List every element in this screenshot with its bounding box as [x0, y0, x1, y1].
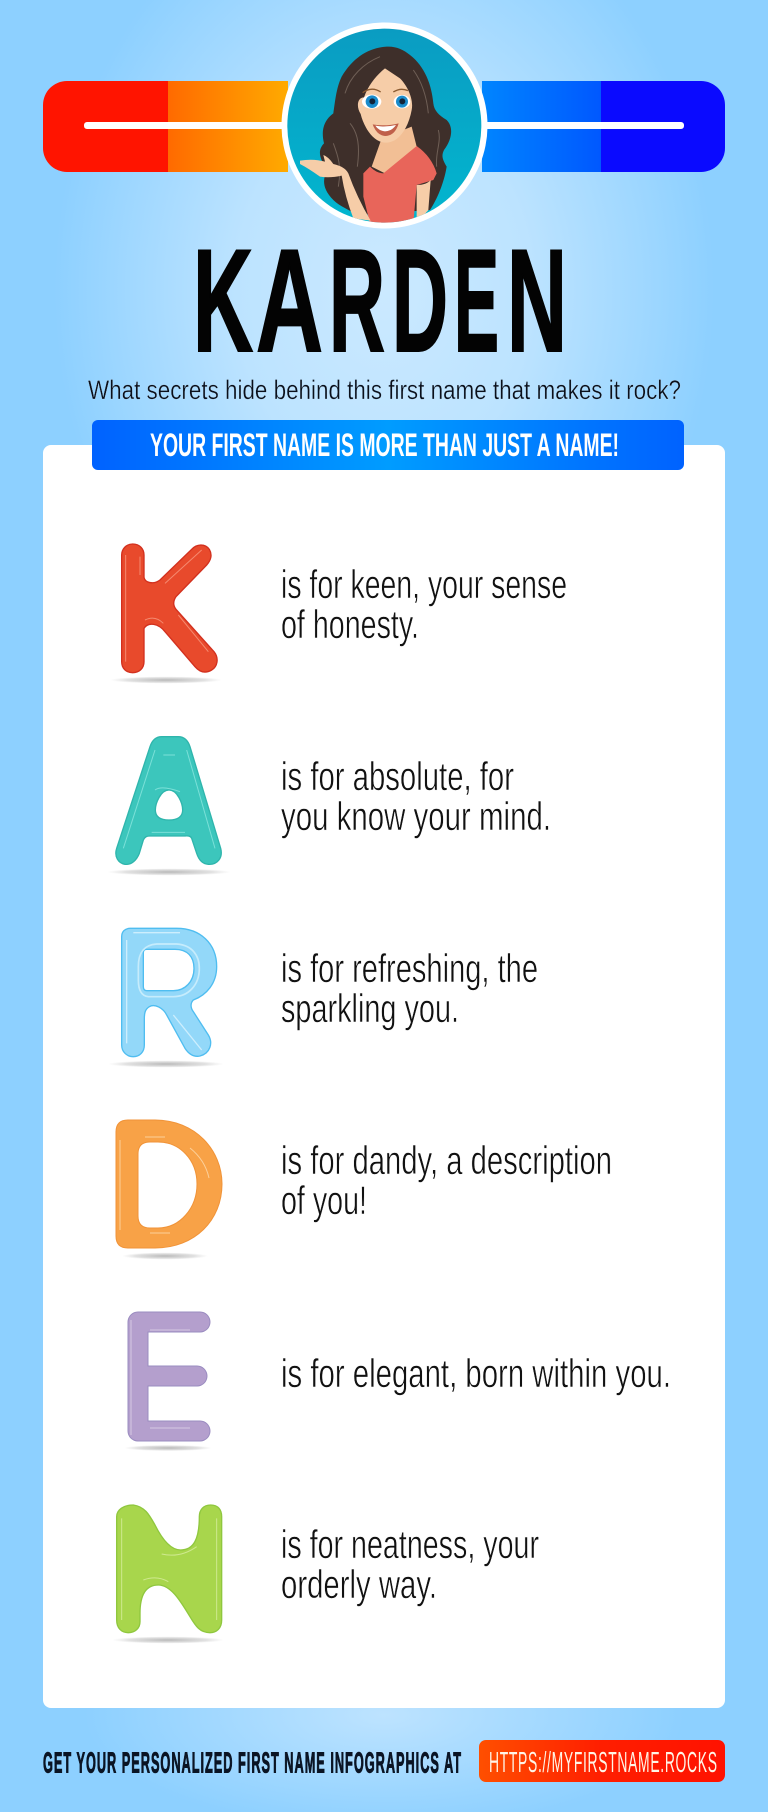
text K: of honesty. [281, 603, 419, 647]
text D: of you! [281, 1179, 367, 1223]
text R: is for refreshing, the [281, 947, 538, 991]
title: KARDEN: E [454, 219, 499, 382]
row E [124, 1320, 671, 1451]
title: KARDEN: R [329, 219, 385, 382]
text N: is for neatness, your [281, 1523, 539, 1567]
header colour bar [43, 81, 725, 172]
hair highlights [333, 57, 439, 187]
letter D [116, 1120, 222, 1260]
text D: is for dandy, a description [281, 1139, 612, 1183]
row N [112, 1505, 539, 1644]
text K: is for keen, your sense [281, 563, 567, 607]
footer call to action: GET YOUR PERSONALIZED FIRST NAME INFOGRAPHICS AT [43, 1747, 461, 1779]
title: KARDEN: A [256, 219, 323, 382]
text K [281, 563, 567, 647]
text N: orderly way. [281, 1563, 437, 1607]
hair [320, 47, 451, 215]
title: KARDEN: K [193, 219, 253, 382]
neck [372, 127, 417, 173]
letter A [107, 737, 231, 876]
letter K [110, 544, 222, 684]
main white panel [43, 445, 725, 1708]
text R: sparkling you. [281, 987, 459, 1031]
arm and hand [300, 155, 371, 221]
letter E [124, 1320, 212, 1451]
row K [110, 544, 567, 684]
text A [281, 755, 551, 839]
letter R [108, 928, 224, 1068]
mouth [373, 123, 399, 136]
eyes [362, 95, 381, 109]
text A: is for absolute, for [281, 755, 514, 799]
avatar portrait [282, 22, 488, 228]
shirt [363, 146, 437, 223]
text N [281, 1523, 539, 1607]
row A [107, 737, 551, 876]
footer url button: HTTPS://MYFIRSTNAME.ROCKS [489, 1745, 717, 1778]
face [358, 68, 412, 143]
letter N [112, 1505, 224, 1644]
text A: you know your mind. [281, 795, 551, 839]
banner [92, 420, 684, 470]
eyebrows [363, 89, 408, 93]
title: KARDEN: D [392, 219, 448, 382]
row R [108, 928, 538, 1068]
text R [281, 947, 538, 1031]
title: KARDEN [193, 219, 567, 382]
text D [281, 1139, 612, 1223]
row D [116, 1120, 612, 1260]
title: KARDEN: N [507, 219, 567, 382]
